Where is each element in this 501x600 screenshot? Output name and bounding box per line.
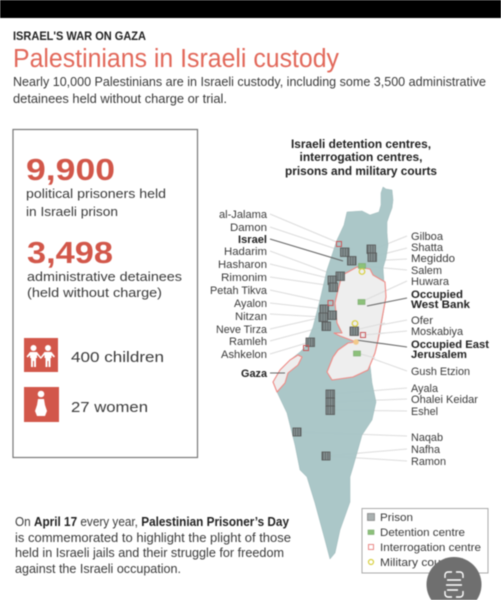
West Bank and East Jerusalem bbox=[327, 267, 386, 380]
panel: statistics bbox=[13, 130, 198, 458]
stat: political prisoners: 9,900 bbox=[26, 152, 115, 187]
labels: right side: Gush Etzion bbox=[411, 366, 470, 378]
labels: right side: Ohalei Keidar bbox=[411, 394, 478, 406]
labels: left side: Nitzan bbox=[235, 311, 267, 323]
labels: left side: Israel bbox=[238, 234, 267, 246]
Prisoner's Day text bbox=[15, 515, 291, 576]
labels: right side: Naqab bbox=[411, 432, 443, 444]
labels: right side: Ofer bbox=[411, 315, 433, 327]
markers: prisons bbox=[293, 245, 376, 460]
icon: children bbox=[24, 338, 58, 372]
labels: right side: Salem bbox=[411, 265, 442, 277]
labels: right side: Nafha bbox=[411, 444, 441, 456]
stat: political prisoners: in Israeli prison bbox=[26, 204, 118, 219]
labels: left side bbox=[210, 209, 268, 380]
labels: left side: Neve Tirza bbox=[216, 324, 268, 336]
labels: right side: Ayala bbox=[411, 383, 439, 395]
legend: Prison bbox=[380, 512, 413, 524]
labels: right side: Shatta bbox=[411, 242, 444, 254]
Gaza strip bbox=[273, 355, 302, 392]
Prisoner's Day text: against the Israeli occupation. bbox=[15, 562, 181, 576]
intro text: Nearly 10,000 Palestinians are in Israeli custody, including some 3,500 administrative bbox=[13, 74, 486, 89]
leader lines bbox=[270, 214, 407, 461]
intro text bbox=[13, 74, 486, 106]
legend: Detention centre bbox=[380, 527, 465, 539]
labels: left side: Ashkelon bbox=[221, 349, 267, 361]
kicker heading: ISRAEL'S WAR ON GAZA bbox=[13, 31, 146, 43]
labels: left side: Ayalon bbox=[234, 298, 267, 310]
labels: right side: Eshel bbox=[411, 406, 438, 418]
labels: left side: Ramleh bbox=[229, 336, 267, 348]
Prisoner's Day text: On April 17 every year, Palestinian Prisoner’s Day bbox=[15, 515, 289, 529]
labels: left side: Gaza bbox=[241, 368, 268, 380]
stat: women: 27 women bbox=[71, 399, 148, 416]
labels: right side: Megiddo bbox=[411, 253, 455, 265]
map heading bbox=[285, 139, 437, 178]
legend bbox=[362, 508, 488, 573]
map heading: prisons and military courts bbox=[285, 166, 437, 178]
stat: administrative detainees: (held without charge) bbox=[27, 285, 162, 300]
scan button overlay bbox=[426, 557, 482, 600]
labels: right side: Occupied bbox=[411, 289, 463, 301]
labels: right side bbox=[411, 231, 489, 468]
map heading: interrogation centres, bbox=[300, 152, 422, 164]
labels: right side: Ramon bbox=[411, 456, 446, 468]
top black bar bbox=[0, 0, 501, 18]
map: Israel and occupied territories bbox=[273, 187, 393, 559]
land bbox=[273, 187, 393, 559]
stat: administrative detainees: administrative detainees bbox=[27, 269, 183, 284]
labels: right side: Occupied East bbox=[411, 339, 489, 351]
markers: military courts bbox=[352, 269, 365, 345]
labels: left side: Rimonim bbox=[221, 272, 267, 284]
icon: woman bbox=[24, 387, 59, 422]
Prisoner's Day text: is commemorated to highlight the plight of those bbox=[15, 531, 291, 545]
labels: right side: Jerusalem bbox=[411, 349, 467, 361]
labels: right side: Gilboa bbox=[411, 231, 444, 243]
labels: left side: Petah Tikva bbox=[210, 285, 268, 297]
stat: administrative detainees bbox=[27, 235, 183, 300]
map heading: Israeli detention centres, bbox=[291, 139, 431, 151]
title: Palestinians in Israeli custody bbox=[13, 45, 339, 73]
labels: right side: West Bank bbox=[411, 299, 471, 311]
labels: left side: Hadarim bbox=[224, 246, 267, 258]
stat: political prisoners: political prisoners held bbox=[26, 186, 166, 201]
intro text: detainees held without charge or trial. bbox=[13, 91, 227, 106]
West Bank leader lines bbox=[270, 239, 407, 373]
Prisoner's Day text: held in Israeli jails and their struggle for freedom bbox=[15, 546, 284, 560]
legend: Military court bbox=[380, 557, 448, 569]
legend: Interrogation centre bbox=[380, 542, 481, 554]
labels: right side: Moskabiya bbox=[411, 326, 464, 338]
labels: left side: al-Jalama bbox=[219, 209, 268, 221]
markers: detention centres bbox=[354, 264, 366, 356]
labels: right side: Huwara bbox=[411, 276, 450, 288]
stat: administrative detainees: 3,498 bbox=[27, 235, 113, 270]
stat: children: 400 children bbox=[71, 349, 164, 366]
labels: left side: Hasharon bbox=[218, 259, 267, 271]
labels: left side: Damon bbox=[230, 222, 267, 234]
stat: political prisoners bbox=[26, 152, 166, 219]
markers: interrogation centres bbox=[304, 242, 366, 350]
